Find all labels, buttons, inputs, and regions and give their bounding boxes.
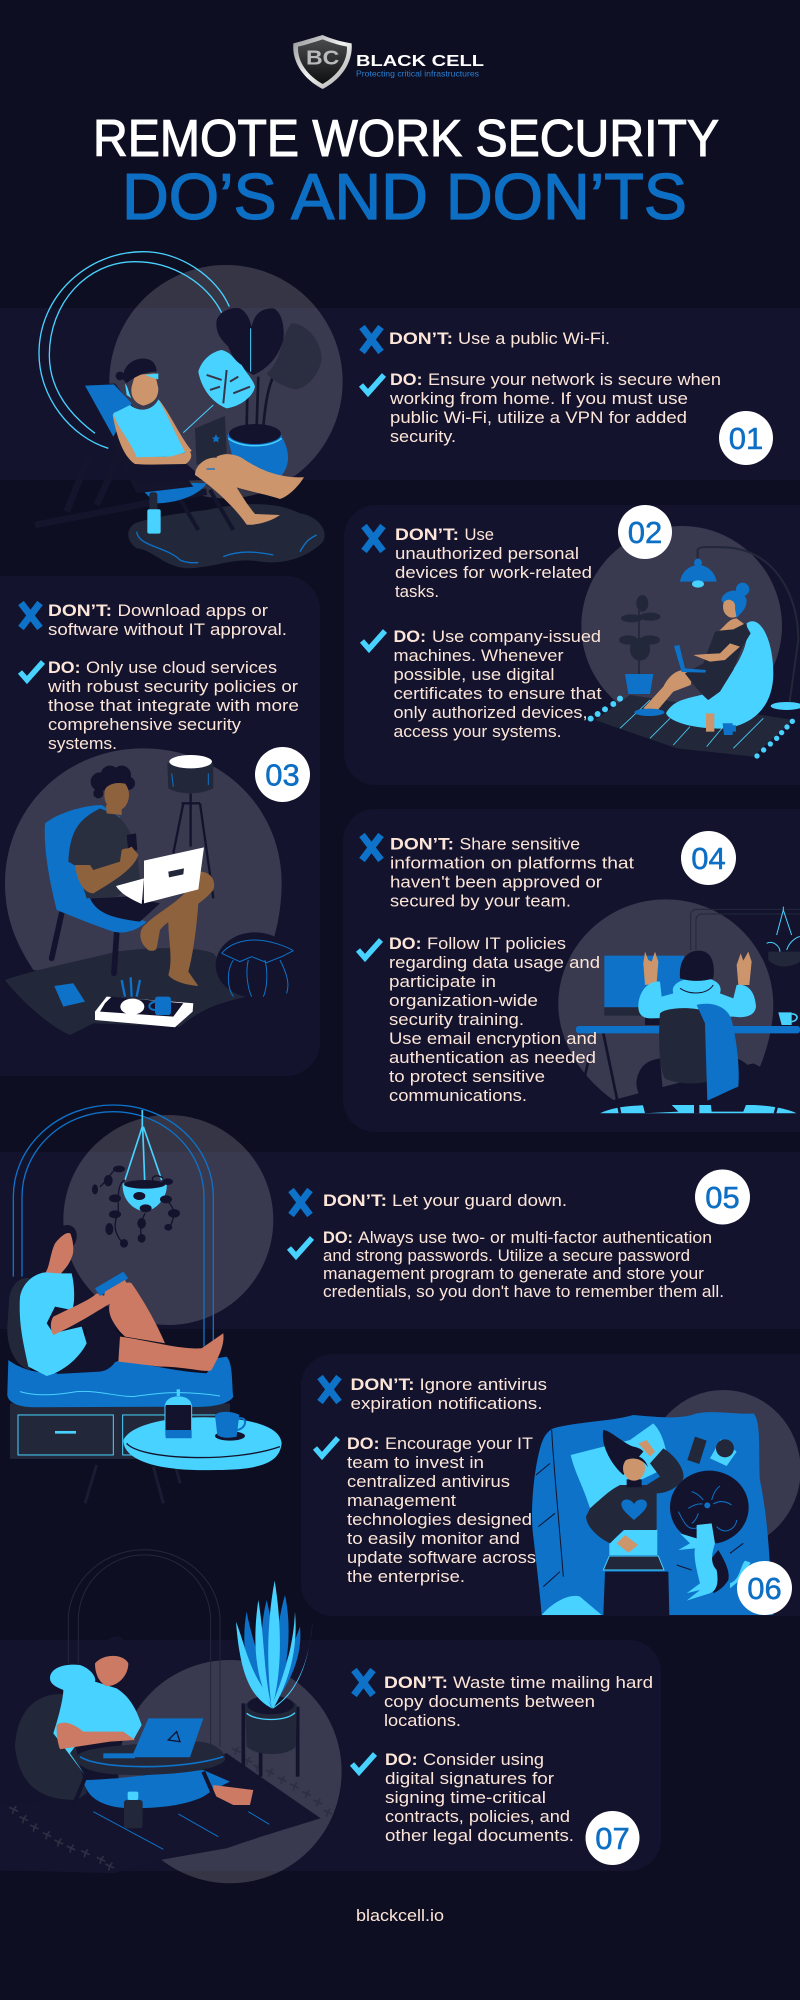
text: tip 03: Download apps or <box>118 601 268 620</box>
text: tip 03: with robust security policies or <box>47 677 298 696</box>
text: tip 07: Waste time mailing hard <box>453 1673 653 1692</box>
text: tip 04: DO: <box>389 934 422 953</box>
text: tip 07: signing time-critical <box>385 1788 546 1807</box>
badge: 05 <box>695 1170 750 1224</box>
badge: 04 <box>681 831 736 885</box>
badge: 03 <box>255 747 310 802</box>
text: tip 04: security training. <box>389 1010 524 1029</box>
icon: shield <box>293 35 352 89</box>
text: tip 02 <box>394 525 602 741</box>
text: tip 04: communications. <box>389 1086 527 1105</box>
text: tip 06: update software across <box>347 1548 536 1567</box>
badge: 01: 01 <box>729 421 763 456</box>
illustration: person at lap table with plant <box>0 1550 342 1883</box>
text: tip 01: Use a public Wi-Fi. <box>458 329 610 348</box>
illustration: woman lying on bed with cat <box>532 1390 800 1615</box>
icon: cross <box>21 603 40 628</box>
illustration: man in armchair with laptop <box>5 748 294 1035</box>
text: tip 06 <box>347 1375 547 1586</box>
icon: check <box>20 662 43 680</box>
icon: shield: BC <box>306 47 339 69</box>
badge: 07: 07 <box>595 1821 630 1856</box>
badge: 06 <box>737 1561 792 1615</box>
text: tip 06: the enterprise. <box>347 1567 465 1586</box>
illustration: woman on window bench <box>7 1105 282 1503</box>
text: tip 05: DON’T: <box>323 1191 387 1210</box>
text: tip 04 <box>389 834 634 1105</box>
icon: check <box>358 940 381 958</box>
text: tip 01: public Wi-Fi, utilize a VPN for added <box>390 408 687 427</box>
badge: 02 <box>618 505 672 559</box>
text: tip 04: regarding data usage and <box>389 953 600 972</box>
text: tip 04: DON’T: <box>390 834 454 854</box>
title: REMOTE WORK SECURITY <box>93 110 719 168</box>
text: tip 05: credentials, so you don't have to remember them all. <box>323 1282 724 1301</box>
badge: 06: 06 <box>747 1571 782 1606</box>
text: tip 04: to protect sensitive <box>389 1067 545 1086</box>
icon: cross <box>291 1190 310 1215</box>
text: tip 02: machines. Whenever <box>394 646 564 665</box>
icon: check <box>352 1754 375 1772</box>
logo tagline: Protecting critical infrastructures <box>356 68 479 78</box>
text: tip 06: expiration notifications. <box>350 1394 542 1413</box>
title <box>93 110 719 233</box>
text: tip 07: Consider using <box>423 1750 544 1769</box>
footer: website: blackcell.io <box>356 1906 444 1925</box>
text: tip 06: to easily monitor and <box>347 1529 520 1548</box>
panel: tip 04 <box>343 809 800 1132</box>
text: tip 06: technologies designed <box>347 1510 532 1529</box>
text: tip 05: and strong passwords. Utilize a secure password <box>323 1246 690 1265</box>
text: tip 05: DO: <box>323 1228 353 1247</box>
text: tip 06: team to invest in <box>347 1453 484 1472</box>
text: tip 04: haven't been approved or <box>390 872 602 892</box>
badge: 07 <box>586 1811 640 1865</box>
text: tip 04: Share sensitive <box>460 834 580 854</box>
panel: tip 07 <box>0 1550 661 1883</box>
icon: cross <box>362 835 381 860</box>
text: tip 07: copy documents between <box>384 1692 595 1711</box>
text: tip 02: Use company-issued <box>432 627 601 646</box>
text: tip 03: Only use cloud services <box>86 658 277 677</box>
text: tip 06: DON’T: <box>350 1375 414 1394</box>
text: tip 01: DON’T: <box>389 329 453 348</box>
icon: check <box>315 1438 338 1456</box>
text: tip 07: other legal documents. <box>385 1826 574 1845</box>
icon: check <box>289 1238 312 1256</box>
text: tip 04: secured by your team. <box>390 892 571 910</box>
text: tip 02: unauthorized personal <box>395 544 579 563</box>
text: tip 06: DO: <box>347 1434 380 1453</box>
text: tip 07: DO: <box>385 1750 418 1769</box>
text: tip 02: access your systems. <box>394 722 562 741</box>
text: tip 02: certificates to ensure that <box>394 684 602 703</box>
icon: cross <box>364 526 383 551</box>
icon: cross <box>320 1377 339 1402</box>
text: tip 03: those that integrate with more <box>48 696 299 715</box>
panel: tip 06 <box>301 1354 800 1616</box>
text: tip 07: DON’T: <box>384 1673 448 1692</box>
icon: check <box>361 375 384 393</box>
text: tip 01: working from home. If you must use <box>389 389 688 408</box>
badge: 05: 05 <box>705 1180 740 1215</box>
text: tip 01: DO: <box>390 370 422 389</box>
text: tip 03: DO: <box>48 658 80 677</box>
text: tip 02: only authorized devices, <box>394 703 588 722</box>
panel: tip 03 <box>0 576 320 1076</box>
text: tip 07: locations. <box>384 1711 461 1730</box>
text: tip 02: DO: <box>394 627 426 646</box>
text: tip 04: authentication as needed <box>389 1048 596 1067</box>
text: tip 02: tasks. <box>395 582 439 601</box>
badge: 03: 03 <box>265 758 300 792</box>
text: tip 03: software without IT approval. <box>48 620 287 639</box>
text: tip 06: Ignore antivirus <box>420 1375 547 1394</box>
text: tip 06: management <box>347 1491 456 1510</box>
text: tip 04: Use email encryption and <box>389 1029 597 1048</box>
text: tip 01: security. <box>390 427 456 446</box>
text: tip 02: DON’T: <box>395 525 459 544</box>
text: tip 07: digital signatures for <box>385 1769 554 1788</box>
text: tip 06: centralized antivirus <box>347 1472 510 1491</box>
icon: check <box>362 631 385 649</box>
panel: tip 02 <box>344 505 800 785</box>
text: tip 01: Ensure your network is secure when <box>428 370 721 389</box>
panel: tip 01 <box>0 252 800 568</box>
text: tip 07 <box>384 1673 653 1845</box>
illustration: man on lounge chair with laptop <box>35 252 343 568</box>
text: tip 03: comprehensive security <box>48 715 242 734</box>
text: tip 06: Encourage your IT <box>385 1434 533 1453</box>
illustration: person at desk from behind <box>558 899 800 1113</box>
panel: tip 05 <box>0 1105 800 1503</box>
illustration: woman on bean bag <box>581 526 800 759</box>
logo: Black Cell <box>293 35 484 89</box>
text: tip 05 <box>323 1191 724 1301</box>
text: tip 02: Use <box>464 525 494 544</box>
text: tip 04: participate in <box>389 972 496 991</box>
text: tip 01 <box>389 329 721 446</box>
text: tip 03: DON’T: <box>48 601 112 620</box>
text: tip 03 <box>47 601 299 753</box>
logo wordmark: BLACK CELL <box>356 53 484 70</box>
text: tip 04: organization-wide <box>389 991 538 1010</box>
text: tip 05: Let your guard down. <box>392 1191 567 1210</box>
subtitle: DO’S AND DON’TS <box>122 160 687 233</box>
icon: cross <box>362 327 381 352</box>
text: tip 04: Follow IT policies <box>427 934 566 953</box>
text: tip 02: possible, use digital <box>394 665 554 684</box>
text: tip 05: Always use two- or multi-factor authentication <box>358 1228 712 1247</box>
icon: cross <box>354 1670 373 1695</box>
badge: 01 <box>719 411 773 465</box>
text: tip 07: contracts, policies, and <box>385 1807 570 1826</box>
text: tip 05: management program to generate and store your <box>323 1264 704 1283</box>
badge: 02: 02 <box>628 515 662 550</box>
text: tip 02: devices for work-related <box>395 563 592 582</box>
text: tip 03: systems. <box>48 734 117 753</box>
badge: 04: 04 <box>691 841 726 876</box>
text: tip 04: information on platforms that <box>390 854 634 872</box>
